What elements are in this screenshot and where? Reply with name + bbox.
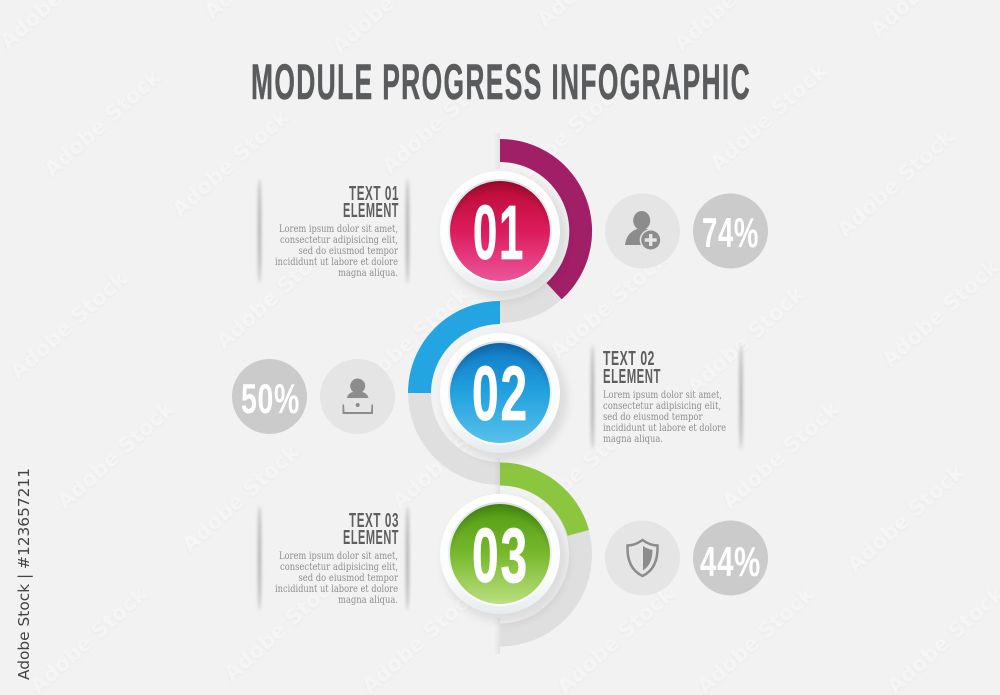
heading: text 03: ELEMENT: [343, 526, 399, 549]
watermark pattern: Adobe Stock: [347, 281, 474, 399]
body text 03: magna aliqua.: [338, 595, 398, 606]
body text 01: incididunt ut labore et dolore: [275, 257, 398, 268]
watermark pattern: Adobe Stock: [211, 236, 338, 354]
watermark pattern: Adobe Stock: [5, 266, 132, 384]
body text 02: Lorem ipsum dolor sit amet,: [603, 390, 722, 401]
watermark pattern: Adobe Stock: [832, 124, 959, 242]
watermark pattern: Adobe Stock: [387, 396, 514, 514]
heading: text 02: [603, 347, 661, 388]
body text 01: magna aliqua.: [338, 268, 398, 279]
badge: 44%: 44%: [700, 538, 761, 585]
progress arc 03: 44%: [500, 462, 592, 646]
watermark pattern: Adobe Stock: [705, 58, 832, 176]
heading: text 03: TEXT 03: [349, 509, 399, 532]
heading: text 02: ELEMENT: [603, 365, 661, 388]
watermark pattern: Adobe Stock: [219, 568, 346, 686]
heading: text 03: [343, 509, 399, 549]
heading: text 01: TEXT 01: [349, 182, 399, 205]
watermark pattern: Adobe Stock: [717, 396, 844, 514]
progress arc 01: 74%: [500, 139, 592, 323]
watermark pattern: Adobe Stock: [545, 246, 672, 364]
panel: text 01: [258, 179, 409, 283]
body text 02: magna aliqua.: [603, 434, 663, 445]
panel: text 03: [258, 506, 409, 610]
badge: 74%: 74%: [702, 209, 759, 256]
watermark pattern: Adobe Stock: [682, 281, 809, 399]
body text 01: consectetur adipisicing elit,: [280, 235, 398, 246]
badge: 50%: 50%: [241, 375, 300, 422]
body text 02: incididunt ut labore et dolore: [603, 423, 726, 434]
watermark pattern: Adobe Stock: [167, 104, 294, 222]
badge: 50%: [232, 359, 307, 434]
body text 03: consectetur adipisicing elit,: [280, 562, 398, 573]
button 03: [440, 494, 567, 622]
badge: 74%: [693, 194, 768, 268]
panel: text 02: [591, 345, 742, 449]
icon: laptop user: [320, 359, 395, 434]
icon: add user: [605, 194, 680, 268]
heading: text 02: TEXT 02: [603, 347, 655, 370]
body text 02: [603, 390, 726, 445]
body text 01: sed do eiusmod tempor: [298, 246, 398, 257]
body text 02: consectetur adipisicing elit,: [603, 401, 721, 412]
body text 03: sed do eiusmod tempor: [298, 573, 398, 584]
watermark pattern: Adobe Stock: [177, 439, 304, 557]
body text 03: Lorem ipsum dolor sit amet,: [279, 551, 398, 562]
watermark pattern: Adobe Stock: [877, 254, 1000, 372]
watermark pattern: Adobe Stock: [377, 61, 504, 179]
body text 01: [275, 224, 398, 279]
body text 01: Lorem ipsum dolor sit amet,: [279, 224, 398, 235]
icon: shield: [605, 520, 680, 596]
button 02: [440, 333, 567, 461]
number 01: 01: [473, 190, 525, 276]
body text 03: [275, 551, 398, 606]
badge: 44%: [693, 520, 768, 596]
watermark pattern: Adobe Stock: [39, 64, 166, 182]
number 02: 02: [472, 351, 529, 437]
watermark pattern: Adobe Stock: [842, 459, 969, 577]
body text 03: incididunt ut labore et dolore: [275, 584, 398, 595]
heading: text 01: ELEMENT: [343, 199, 399, 222]
watermark pattern: Adobe Stock: [52, 396, 179, 514]
button 01: [440, 171, 567, 299]
body text 02: sed do eiusmod tempor: [603, 412, 703, 423]
stock id label: Adobe Stock | #123657211: [15, 468, 33, 680]
watermark pattern: Adobe Stock: [517, 411, 644, 529]
watermark pattern: Adobe Stock: [502, 76, 629, 194]
center fold shadows: [494, 133, 500, 654]
heading: text 01: [343, 182, 399, 222]
progress arc 02: 50%: [408, 301, 500, 485]
number 03: 03: [472, 513, 529, 599]
